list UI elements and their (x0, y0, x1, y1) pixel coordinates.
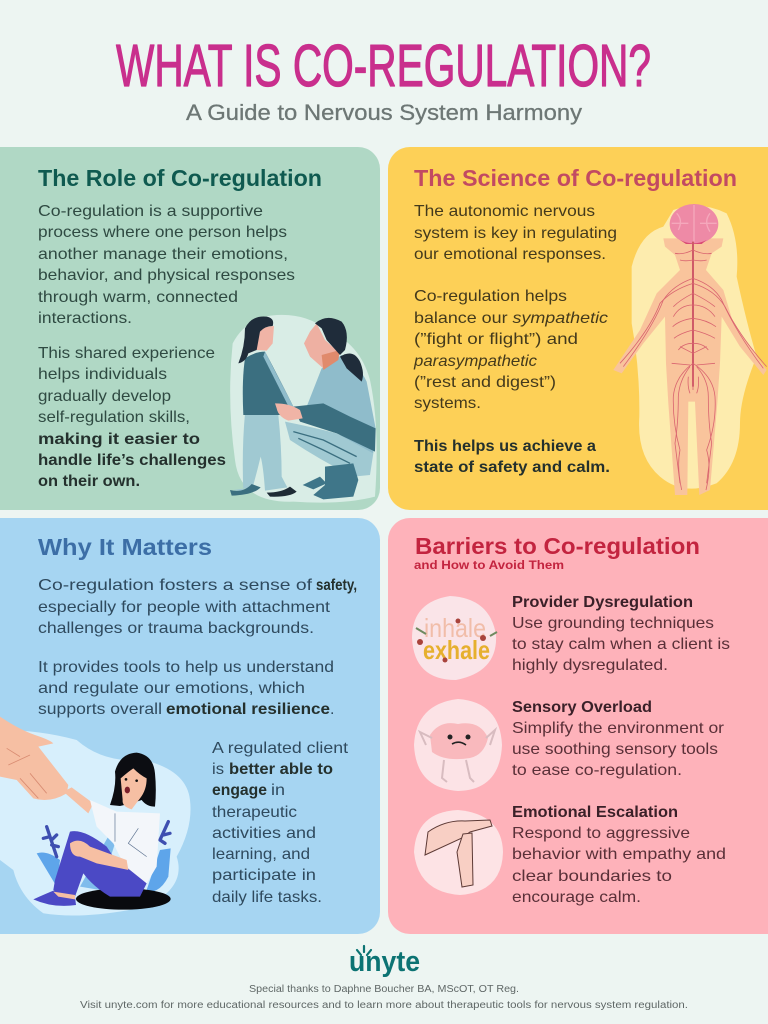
icon: time-out hands (414, 810, 503, 895)
heading: why it matters: Why It Matters (38, 534, 212, 560)
text: regulated client (212, 740, 349, 906)
text: sensory overload: Simplify the environment or (512, 720, 725, 737)
text: tools: It provides tools to help us understand (38, 659, 334, 676)
text: regulated client: better able to (229, 761, 333, 778)
text: provider dysregulation: Use grounding techniques (512, 615, 714, 632)
text: regulated client: in (271, 782, 285, 799)
text: sensory overload: use soothing sensory tools (512, 741, 718, 758)
text: emotional escalation: clear boundaries to (512, 868, 672, 885)
panel: the science of co-regulation (388, 147, 768, 510)
text: shared experience: helps individuals (38, 366, 167, 383)
text: balance: (”fight or flight”) and (414, 331, 578, 348)
text: safety and calm (414, 438, 610, 476)
text: provider dysregulation (512, 594, 730, 674)
text: tools: . (330, 701, 334, 718)
icon: inhale exhale: inhale (424, 613, 486, 643)
text: shared experience: handle life’s challenges (38, 452, 226, 469)
text: autonomic nervous system: The autonomic nervous (414, 203, 595, 220)
text: emotional escalation: behavior with empathy and (512, 846, 726, 863)
text: safety: Co-regulation fosters a sense of (38, 577, 313, 594)
text: role definition: Co-regulation is a supportive (38, 203, 263, 220)
text: tools: and regulate our emotions, which (38, 680, 305, 697)
text: tools: supports overall (38, 701, 162, 718)
text: balance (413, 288, 608, 412)
text: regulated client: A regulated client (212, 740, 349, 757)
illustration: mother and child (230, 315, 377, 503)
text: shared experience (38, 345, 226, 490)
panel: why it matters (0, 518, 380, 934)
text: sensory overload: Sensory Overload (512, 699, 652, 716)
text: emotional escalation: Respond to aggressive (512, 825, 690, 842)
text: role definition: process where one person helps (38, 224, 287, 241)
logo: unyte: unyte (349, 946, 420, 978)
text: provider dysregulation: highly dysregulated. (512, 657, 668, 674)
icon: inhale exhale (412, 596, 497, 680)
icon: inhale exhale: exhale (423, 635, 490, 665)
text: autonomic nervous system: our emotional responses. (414, 246, 606, 263)
text: safety (38, 577, 357, 637)
panel: the role of co-regulation (0, 147, 380, 510)
text: shared experience: self-regulation skills, (38, 409, 190, 426)
text: regulated client: learning, and (212, 846, 310, 863)
heading: science: The Science of Co-regulation (414, 165, 737, 191)
text: balance: parasympathetic (413, 353, 537, 370)
text: role definition (38, 203, 295, 327)
text: role definition: another manage their emotions, (38, 246, 288, 263)
panel: barriers to co-regulation (388, 518, 768, 934)
text: autonomic nervous system (414, 203, 617, 263)
text: regulated client: therapeutic (212, 804, 297, 821)
text: safety and calm: state of safety and calm. (414, 459, 610, 476)
footer credits: Special thanks to Daphne Boucher BA, MScOT, OT Reg. (249, 984, 519, 995)
text: provider dysregulation: to stay calm when a client is (512, 636, 730, 653)
text: role definition: behavior, and physical responses (38, 267, 295, 284)
heading: barriers: Barriers to Co-regulation (415, 533, 700, 559)
text: shared experience: This shared experience (38, 345, 215, 362)
text: safety: especially for people with attachment (38, 599, 331, 616)
text: balance: (”rest and digest”) (414, 374, 556, 391)
footer credits (80, 984, 688, 1011)
text: regulated client: daily life tasks. (212, 889, 322, 906)
text: autonomic nervous system: system is key in regulating (414, 225, 617, 242)
text: safety: safety, (316, 577, 357, 594)
text: emotional escalation (512, 804, 726, 906)
text: shared experience: on their own. (38, 473, 140, 490)
footer credits: Visit unyte.com for more educational resources and to learn more about therapeutic tools for nervous system regulation. (80, 1000, 688, 1011)
text: shared experience: gradually develop (38, 388, 171, 405)
text: sensory overload: to ease co-regulation. (512, 762, 682, 779)
text: sensory overload (512, 699, 725, 779)
text: regulated client: is (212, 761, 224, 778)
text: shared experience: making it easier to (38, 431, 200, 448)
text: regulated client: activities and (212, 825, 316, 842)
illustration: nervous system body (613, 204, 767, 495)
text: safety: challenges or trauma backgrounds. (38, 620, 314, 637)
text: provider dysregulation: Provider Dysregulation (512, 594, 693, 611)
text: emotional escalation: encourage calm. (512, 889, 641, 906)
text: role definition: through warm, connected (38, 289, 238, 306)
text: balance: Co-regulation helps (414, 288, 567, 305)
text: tools: emotional resilience (166, 701, 330, 718)
text: balance: balance our sympathetic (414, 310, 608, 327)
text: emotional escalation: Emotional Escalation (512, 804, 678, 821)
icon: stressed brain (414, 699, 502, 791)
text: role definition: interactions. (38, 310, 132, 327)
text: tools (38, 659, 334, 718)
text: balance: systems. (414, 395, 481, 412)
subtitle: A Guide to Nervous System Harmony (186, 100, 582, 125)
heading: role: The Role of Co-regulation (38, 165, 322, 191)
subheading: how to avoid them: and How to Avoid Them (414, 558, 564, 572)
text: safety and calm: This helps us achieve a (414, 438, 596, 455)
text: regulated client: participate in (212, 867, 316, 884)
illustration: helping hand and seated girl (0, 717, 191, 916)
text: regulated client: engage (212, 782, 267, 799)
